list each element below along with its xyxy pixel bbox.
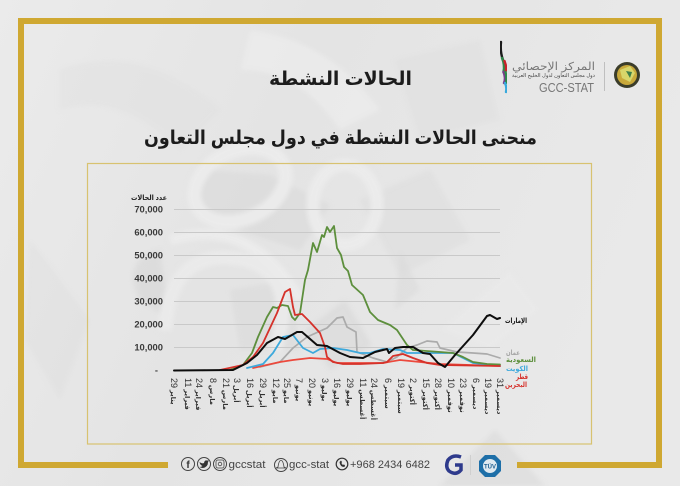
x axis date labels: 11 أغسطس — [358, 378, 368, 419]
y axis labels — [134, 204, 163, 376]
y axis labels: 30,000 — [134, 296, 163, 306]
x axis date labels: 31 ديسمبر — [495, 378, 505, 415]
y axis labels: 40,000 — [134, 272, 163, 284]
y axis labels: 60,000 — [134, 226, 163, 238]
logo arabic name: المركز الإحصائي — [512, 61, 595, 73]
x axis date labels: 3 يوليو — [320, 378, 330, 402]
x axis date labels: 29 أبريل — [258, 378, 268, 408]
panel: chart frame — [88, 164, 592, 444]
icon: facebook: f — [186, 460, 190, 471]
x axis date labels: 11 فبراير — [183, 378, 193, 410]
x axis date labels: 24 أغسطس — [369, 378, 379, 420]
icon: whatsapp — [336, 458, 348, 470]
x axis date labels: 23 نوفمبر — [458, 378, 468, 413]
y axis labels: 70,000 — [134, 204, 163, 214]
icon: instagram — [214, 458, 226, 470]
legend: السعودية — [506, 357, 536, 364]
y axis title: عدد الحالات — [131, 195, 167, 202]
handle: gcc-stat: gcc-stat — [289, 459, 329, 471]
legend: البحرين — [505, 382, 527, 389]
series: Saudi Arabia — [230, 226, 500, 370]
logo swoosh — [501, 42, 506, 92]
icon: twitter — [198, 458, 210, 470]
series: UAE — [174, 315, 500, 370]
y axis labels: 50,000 — [134, 250, 163, 260]
legend — [505, 318, 536, 389]
series: Oman — [260, 317, 500, 367]
GCC emblem — [614, 62, 640, 88]
legend: قطر — [515, 374, 528, 381]
legend: عمان — [506, 350, 520, 357]
x axis date labels: 28 أكتوبر — [433, 378, 443, 410]
icon: snapchat — [274, 458, 288, 472]
logo arabic subtitle: دول مجلس التعاون لدول الخليج العربية — [512, 73, 595, 79]
icon: certification G — [447, 456, 461, 473]
phone number: +968 2434 6482 — [350, 459, 430, 471]
x axis date labels: 20 يونيو — [307, 378, 317, 407]
y axis labels: 20,000 — [134, 318, 163, 330]
y axis labels: - — [155, 364, 158, 376]
legend: الكويت — [506, 365, 528, 373]
subtitle: منحنى الحالات النشطة في دول مجلس التعاون — [144, 128, 537, 149]
series: Qatar — [253, 358, 500, 368]
icon: TUV badge: TÜV — [484, 464, 496, 470]
x axis date labels: 6 ديسمبر — [471, 378, 481, 410]
x axis date labels: 24 فبراير — [194, 378, 204, 410]
logo GCC-STAT text: GCC-STAT — [539, 81, 594, 95]
footer — [182, 455, 501, 477]
x axis date labels: 2 أكتوبر — [408, 378, 418, 405]
icon: facebook — [182, 458, 194, 471]
x axis date labels: 8 مارس — [208, 378, 218, 405]
legend: الإمارات — [505, 318, 527, 325]
logo: GCC-STAT — [501, 42, 640, 95]
x axis date labels: 15 أكتوبر — [421, 378, 431, 410]
icon: TUV badge — [479, 455, 501, 477]
grid lines — [174, 210, 500, 348]
x axis date labels: 25 مايو — [282, 378, 292, 403]
x axis date labels: 19 سبتمبر — [396, 378, 406, 414]
series lines — [174, 226, 500, 370]
y axis labels: 10,000 — [134, 342, 163, 352]
x axis date labels: 21 مارس — [221, 378, 231, 410]
x axis date labels: 10 نوفمبر — [446, 378, 456, 413]
series: Bahrain — [220, 289, 500, 370]
x axis date labels: 3 أبريل — [232, 378, 242, 403]
x axis date labels: 29 يوليو — [345, 378, 355, 407]
line chart — [131, 195, 536, 420]
title: الحالات النشطة — [269, 69, 412, 90]
x axis date labels: 29 يناير — [169, 378, 179, 405]
x axis date labels: 16 أبريل — [245, 378, 255, 408]
x axis date labels: 19 ديسمبر — [483, 378, 493, 415]
x axis date labels: 16 يوليو — [332, 378, 342, 407]
handle: gccstat: gccstat — [228, 459, 266, 471]
x axis date labels — [169, 378, 505, 420]
x axis date labels: 7 يونيو — [294, 378, 304, 402]
series: Kuwait — [247, 335, 500, 368]
x axis date labels: 6 سبتمبر — [383, 378, 393, 409]
x axis date labels: 12 مايو — [271, 378, 281, 403]
